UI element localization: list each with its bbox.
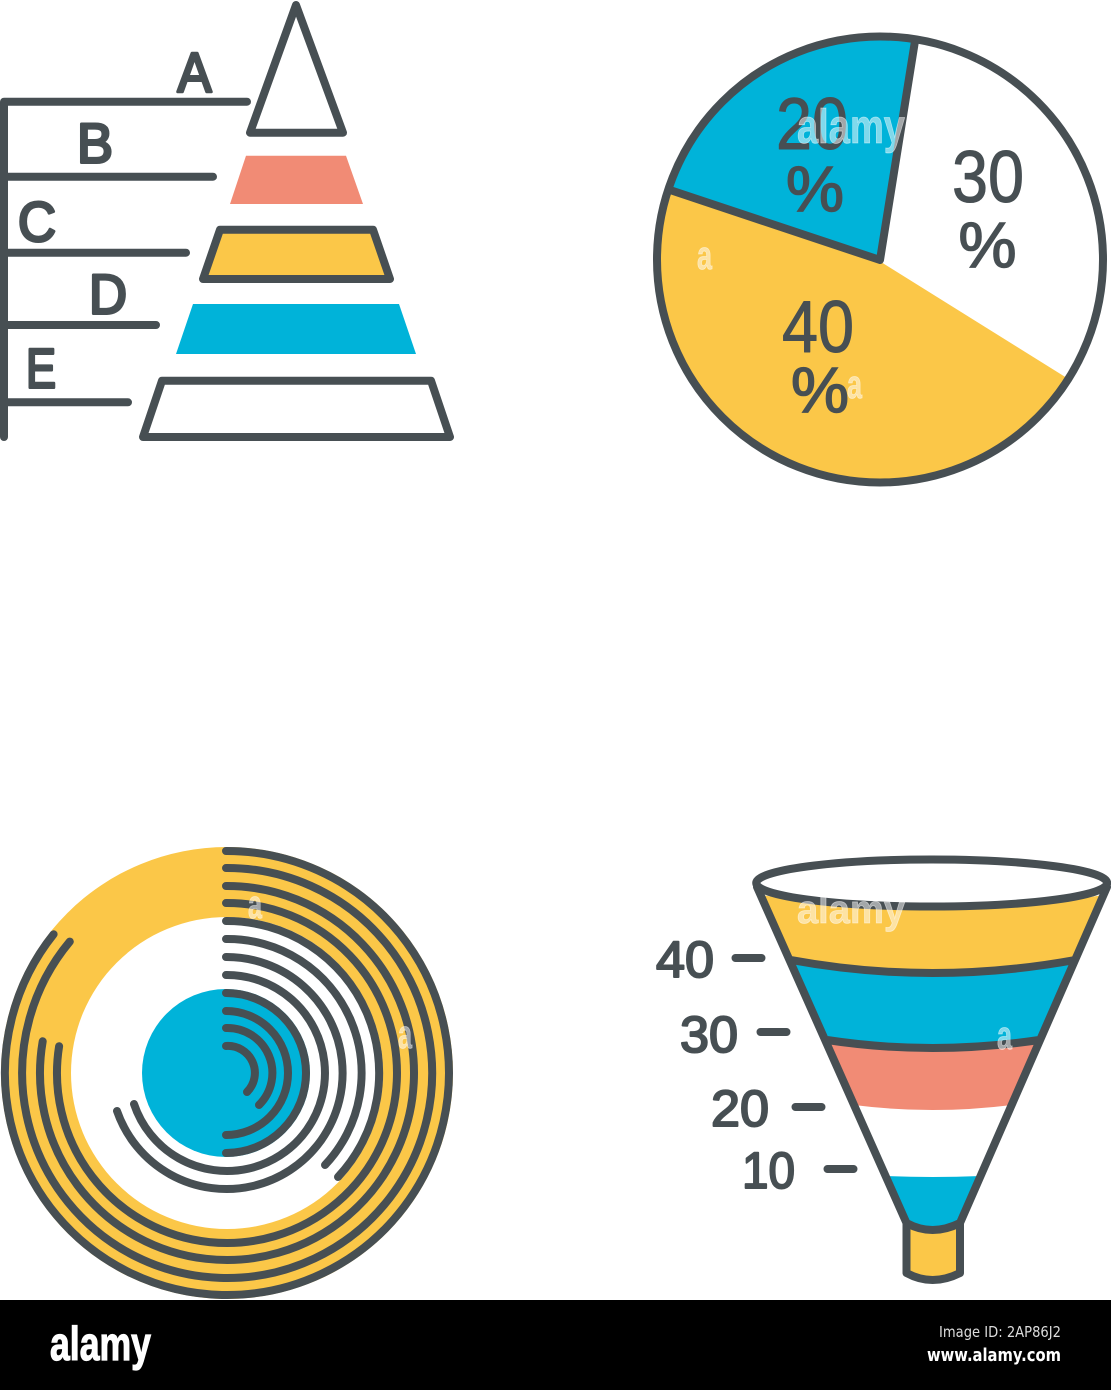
letter labels: B [77, 112, 113, 174]
pie value labels: % [786, 153, 844, 225]
letter labels: A [178, 40, 212, 104]
pie slice yellow 40 percent [657, 188, 1068, 483]
footer bar [0, 1300, 1111, 1390]
letter labels [18, 40, 212, 400]
funnel value labels: 40 [656, 931, 714, 988]
funnel value labels: 20 [711, 1080, 769, 1137]
funnel value labels: 30 [680, 1006, 738, 1063]
watermarks: a [847, 363, 863, 407]
funnel band yellow [762, 895, 1103, 973]
footer website: www.alamy.com [927, 1345, 1061, 1366]
letter labels: E [26, 336, 56, 400]
funnel label dashes [736, 958, 854, 1169]
panel: radial ring chart [1, 847, 453, 1299]
panel: funnel chart [656, 860, 1107, 1280]
watermarks: a [697, 234, 713, 278]
pie dividers [670, 41, 915, 260]
pie value labels: 40 [782, 287, 854, 368]
watermarks: alamy [797, 888, 906, 932]
funnel rim ellipse [756, 860, 1107, 906]
footer image id: Image ID: 2AP86J2 [939, 1323, 1061, 1341]
concentric progress arcs [5, 851, 449, 1295]
pie value labels [776, 84, 1024, 426]
pie slice blue 20 percent [669, 37, 915, 262]
pyramid tier E outline [143, 381, 450, 437]
funnel band salmon [825, 1040, 1041, 1110]
watermarks: a [398, 1013, 412, 1057]
footer alamy logo: alamy [50, 1317, 151, 1370]
pyramid tier B salmon [230, 156, 363, 204]
funnel value labels [656, 931, 795, 1199]
panel: pie chart [657, 36, 1103, 483]
letter labels: D [89, 262, 127, 326]
pie outer ring [657, 36, 1103, 482]
label bracket lines [4, 102, 247, 437]
funnel band blue lower [886, 1176, 981, 1230]
yellow donut band [1, 847, 453, 1299]
watermarks: a [248, 883, 262, 927]
watermarks: alamy [797, 101, 905, 154]
watermarks: a [997, 1014, 1013, 1058]
pyramid tier A outline [250, 5, 343, 133]
pie value labels: 30 [952, 137, 1024, 218]
funnel band blue [789, 960, 1077, 1048]
pie value labels: % [958, 209, 1016, 281]
pie value labels: 20 [776, 84, 848, 165]
funnel value labels: 10 [742, 1142, 795, 1199]
letter labels: C [18, 190, 56, 253]
pyramid tier C yellow [203, 230, 390, 279]
funnel spout yellow [906, 1223, 960, 1280]
pyramid tier D blue [176, 304, 416, 354]
panel: pyramid chart [4, 5, 450, 437]
blue center circle [142, 989, 310, 1157]
watermarks [248, 101, 1013, 1058]
pie value labels: % [791, 354, 849, 426]
funnel outline [757, 887, 1107, 1280]
